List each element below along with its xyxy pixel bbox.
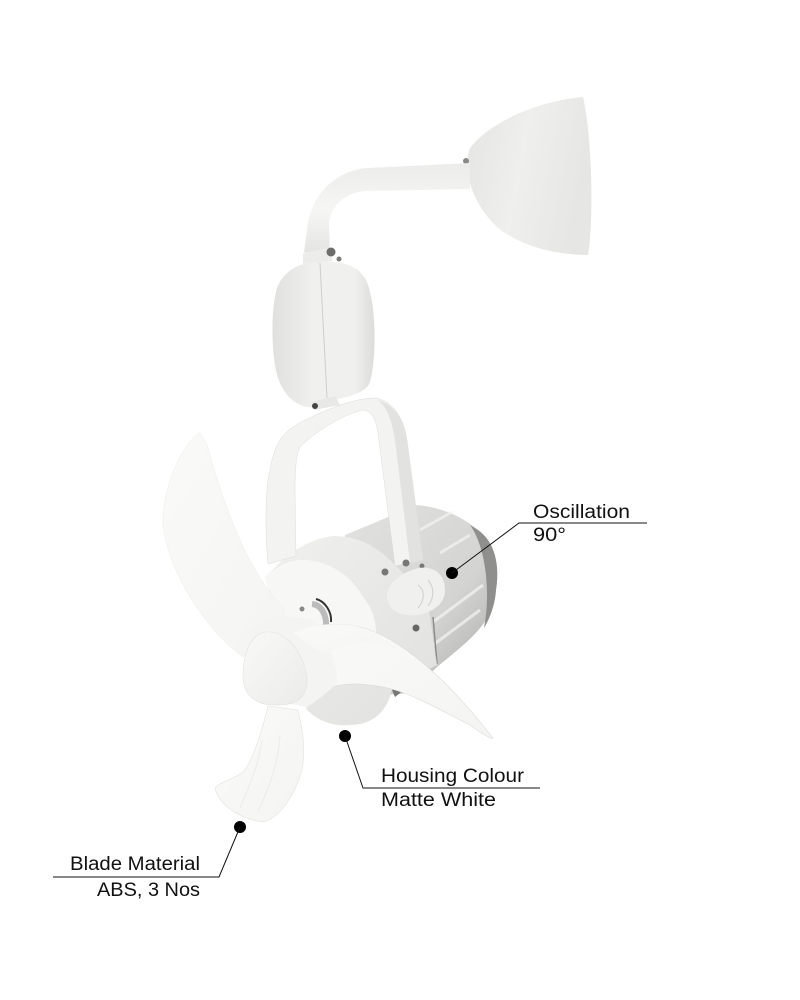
lower fan blade — [215, 706, 304, 822]
callout: blade material: ABS, 3 Nos — [97, 880, 200, 901]
right fan blade — [293, 624, 493, 738]
curved support arm — [303, 163, 470, 264]
tilt pivot knob — [387, 568, 445, 616]
U-shaped yoke bracket — [266, 398, 424, 576]
callout: housing colour: Matte White — [381, 790, 496, 811]
callout: housing colour: Housing Colour — [381, 766, 525, 787]
callout: blade material — [53, 821, 246, 901]
oscillator pod — [272, 262, 374, 410]
callout: oscillation: Oscillation — [533, 502, 630, 523]
motor front housing — [265, 536, 437, 725]
callout: blade material: Blade Material — [70, 854, 200, 875]
callout: oscillation: 90° — [533, 525, 566, 546]
motor rear ribbed housing — [340, 505, 497, 697]
fan hub nose cone — [243, 617, 400, 707]
upper left fan blade — [163, 433, 285, 657]
callout: oscillation — [446, 502, 647, 579]
callout: housing colour — [339, 730, 540, 811]
wall mount dome — [463, 97, 591, 255]
